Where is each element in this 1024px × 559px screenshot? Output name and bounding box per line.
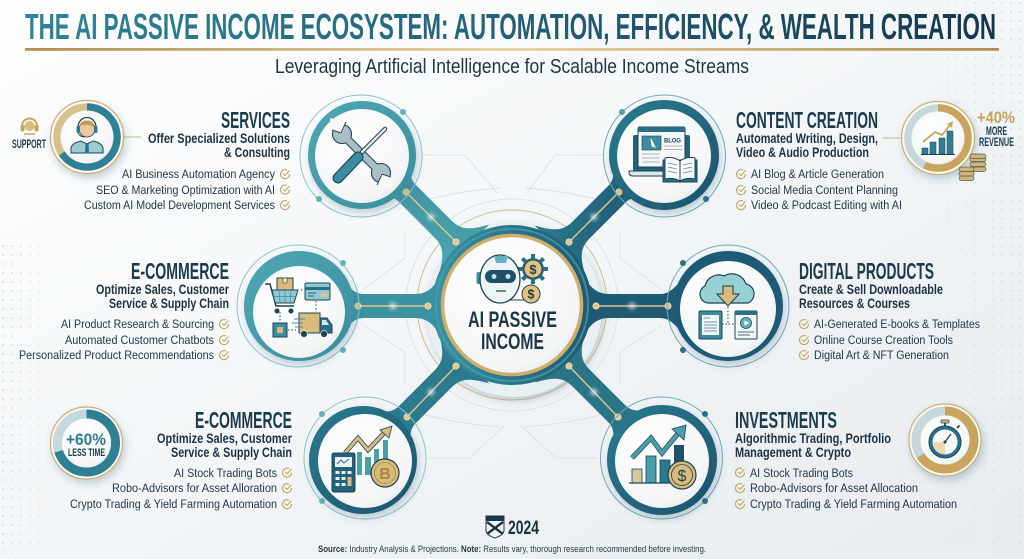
icon: robot with gears and coins: $ bbox=[528, 288, 535, 302]
panel: e-commerce middle text bbox=[19, 258, 230, 362]
bullet list: AI Blog & Article Generation bbox=[751, 167, 884, 181]
icon: headset bbox=[20, 119, 38, 134]
icon: stopwatch bbox=[929, 420, 961, 458]
subtitle: Leveraging Artificial Intelligence for Scalable Income Streams bbox=[275, 56, 749, 78]
icon: shield bbox=[486, 516, 504, 538]
bullet list: Social Media Content Planning bbox=[751, 183, 898, 197]
stat bbox=[977, 109, 1015, 149]
icon: robot with gears and coins bbox=[476, 254, 548, 303]
central hub bbox=[355, 189, 671, 420]
bullet list bbox=[737, 167, 902, 212]
subheading: Algorithmic Trading, Portfolio bbox=[735, 431, 891, 446]
icon: calculator, bars and bitcoin: B bbox=[379, 466, 391, 483]
callout: support bbox=[12, 100, 141, 174]
subheading bbox=[96, 282, 230, 311]
heading: E-COMMERCE bbox=[131, 258, 229, 284]
bullet list: AI-Generated E-books & Templates bbox=[814, 317, 980, 331]
bullet list bbox=[736, 466, 957, 511]
bullet list: Automated Customer Chatbots bbox=[65, 333, 214, 347]
bullet list: Robo-Advisors for Asset Alloration bbox=[112, 481, 277, 495]
icon: support agent bbox=[71, 118, 103, 153]
heading: SERVICES bbox=[221, 107, 290, 133]
stat: +40% bbox=[977, 109, 1015, 127]
subheading: Offer Specialized Solutions bbox=[148, 131, 290, 146]
hub label: AI PASSIVE bbox=[468, 307, 557, 332]
icon: revenue chart bbox=[921, 121, 955, 154]
subheading: Create & Sell Downloadable bbox=[799, 282, 943, 297]
bullet list bbox=[800, 317, 980, 362]
panel: investments text bbox=[735, 407, 957, 511]
node: digital products bbox=[667, 245, 789, 367]
hub halo bbox=[406, 199, 618, 411]
bullet list: SEO & Marketing Optimization with AI bbox=[96, 183, 275, 197]
icon: cloud download, tablet and video bbox=[699, 274, 757, 339]
icon: coin stacks bbox=[959, 154, 986, 180]
icon: growth chart and dollar coin: $ bbox=[678, 468, 687, 485]
subheading: Service & Supply Chain bbox=[171, 445, 292, 460]
label: SUPPORT bbox=[12, 139, 46, 151]
subheading: Service & Supply Chain bbox=[109, 296, 229, 311]
subheading bbox=[736, 131, 878, 160]
heading: INVESTMENTS bbox=[735, 407, 837, 433]
bullet list: Custom AI Model Development Services bbox=[84, 198, 275, 212]
subheading bbox=[735, 431, 891, 460]
source note: Source: Industry Analysis & Projections. Note: Results vary, thorough research recommended before investing. bbox=[318, 544, 706, 554]
subheading: Resources & Courses bbox=[799, 296, 910, 311]
subheading bbox=[799, 282, 943, 311]
bullet list: Crypto Trading & Yield Farming Automation bbox=[70, 497, 277, 511]
callout: less time bbox=[50, 407, 122, 479]
stat: MORE bbox=[986, 126, 1007, 138]
icon: blog laptop and book: BLOG bbox=[664, 138, 681, 144]
bullet list bbox=[19, 317, 229, 362]
panel: services text bbox=[84, 107, 290, 212]
panel: e-commerce lower text bbox=[70, 407, 293, 511]
callout: more revenue bbox=[883, 102, 1015, 180]
logo and year bbox=[486, 516, 539, 539]
stat bbox=[66, 430, 106, 459]
subheading: Video & Audio Production bbox=[736, 145, 869, 160]
bullet list: AI Stock Trading Bots bbox=[750, 466, 853, 480]
bullet list bbox=[70, 466, 292, 511]
bullet list: Online Course Creation Tools bbox=[814, 333, 953, 347]
hub label: INCOME bbox=[481, 329, 544, 354]
bullet list: AI Stock Trading Bots bbox=[174, 466, 277, 480]
heading: CONTENT CREATION bbox=[736, 107, 878, 133]
bullet list: Robo-Advisors for Asset Allocation bbox=[750, 481, 918, 495]
callout: stopwatch bbox=[909, 404, 981, 476]
bullet list: AI Business Automation Agency bbox=[122, 167, 276, 181]
icon: robot with gears and coins: $ bbox=[529, 262, 537, 277]
node: investments bbox=[600, 397, 722, 519]
subheading: Optimize Sales, Customer bbox=[96, 282, 230, 297]
node: services bbox=[300, 95, 422, 217]
year: 2024 bbox=[508, 518, 539, 539]
icon: wrench and screwdriver bbox=[330, 118, 393, 189]
subheading: Optimize Sales, Customer bbox=[157, 431, 293, 446]
heading: DIGITAL PRODUCTS bbox=[799, 258, 934, 284]
hub connectors bbox=[344, 154, 680, 454]
node: content creation bbox=[604, 95, 726, 217]
node: e-commerce middle bbox=[237, 245, 359, 367]
bullet list: Video & Podcast Editing with AI bbox=[751, 198, 902, 212]
subheading: Management & Crypto bbox=[735, 445, 851, 460]
hub label bbox=[468, 307, 557, 354]
stat: +60% bbox=[66, 430, 106, 449]
bullet list: AI Product Research & Sourcing bbox=[61, 317, 214, 331]
icon: cart, card and truck bbox=[265, 278, 332, 337]
node: e-commerce lower bbox=[304, 397, 426, 519]
heading: E-COMMERCE bbox=[195, 407, 292, 433]
subheading: & Consulting bbox=[224, 145, 290, 160]
subheading bbox=[148, 131, 290, 160]
bullet list: Personalized Product Recommendations bbox=[19, 348, 214, 362]
panel: content creation text bbox=[736, 107, 902, 212]
bullet list bbox=[84, 167, 290, 212]
bullet list: Digital Art & NFT Generation bbox=[814, 348, 949, 362]
subheading: Automated Writing, Design, bbox=[736, 131, 878, 146]
panel: digital products text bbox=[799, 258, 980, 362]
subheading bbox=[157, 431, 293, 460]
stat: LESS TIME bbox=[68, 447, 105, 459]
bullet list: Crypto Trading & Yield Farming Automation bbox=[750, 497, 957, 511]
